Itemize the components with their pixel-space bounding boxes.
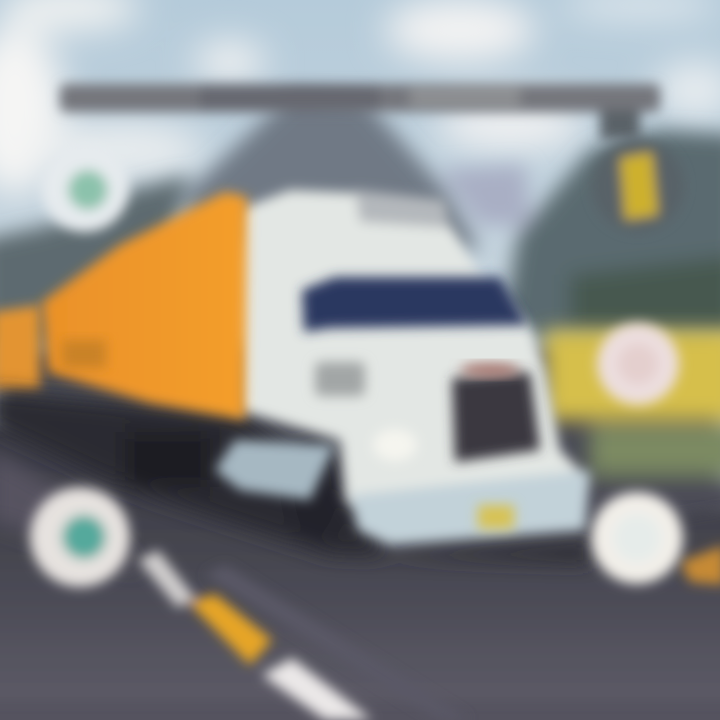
field: yellow and green (545, 330, 720, 520)
road (0, 420, 720, 720)
road markings (138, 545, 720, 720)
title banner (60, 84, 660, 140)
orange trailer (42, 192, 247, 420)
icon: top-right badge (592, 140, 684, 232)
icon: bottom-right badge (591, 492, 683, 584)
cab body (215, 190, 590, 545)
trailer logo (62, 340, 106, 368)
mountains (0, 95, 720, 350)
rear trailer (0, 305, 40, 392)
icon: top-left badge (41, 144, 129, 232)
icon: bottom-left badge (30, 487, 130, 587)
truck (0, 190, 590, 562)
windshield (302, 277, 528, 332)
chassis and wheels (0, 390, 590, 562)
icon: middle-right badge (597, 323, 679, 405)
headlight and door details (315, 362, 514, 529)
grille (452, 372, 540, 462)
